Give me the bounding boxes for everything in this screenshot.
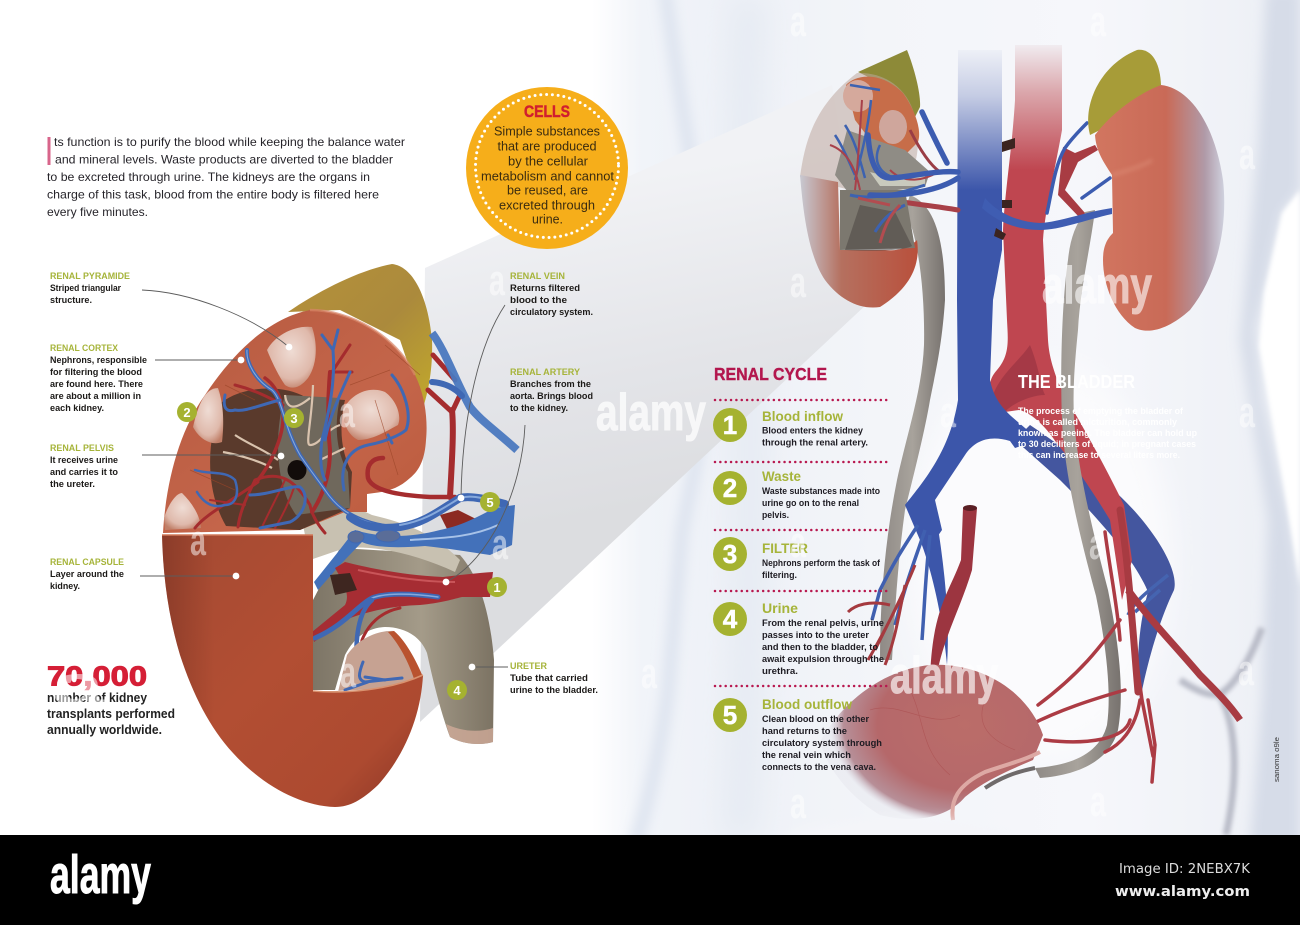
step 1: blood inflow xyxy=(713,408,868,448)
cells heading: CELLS xyxy=(524,102,570,121)
image id: Image ID: 2NEBX7K xyxy=(1119,862,1250,877)
kidney number badges: 1 xyxy=(493,580,501,595)
label: renal pyramide: RENAL PYRAMIDE xyxy=(50,271,130,281)
alamy watermarks: a xyxy=(1090,777,1106,826)
the bladder text block: The process of emptying the bladder of xyxy=(1018,406,1184,417)
step 5: blood outflow xyxy=(713,696,882,773)
label: renal cortex: are found here. There xyxy=(50,379,143,389)
left adrenal xyxy=(858,50,920,117)
callout: cells: be reused, are xyxy=(507,184,588,198)
lower cut cortex xyxy=(313,631,423,692)
upper renal vein branch xyxy=(432,333,517,450)
step 5: blood outflow: circulatory system through xyxy=(762,738,882,749)
left kidney xyxy=(800,73,940,308)
alamy watermarks: a xyxy=(940,388,956,437)
website: www.alamy.com xyxy=(1115,884,1250,900)
right ureter xyxy=(1035,210,1121,778)
vena cava xyxy=(905,50,1040,540)
left renal artery xyxy=(850,197,958,243)
label: renal cortex: for filtering the blood xyxy=(50,367,142,377)
lower blue branch xyxy=(315,594,438,638)
label: renal pyramide: Striped triangular xyxy=(50,283,121,293)
dark artery blob xyxy=(440,510,478,540)
step 5: blood outflow: 5 xyxy=(723,700,737,730)
leader lines xyxy=(140,290,525,667)
alamy watermarks: a xyxy=(641,649,657,698)
sinus veins xyxy=(247,350,385,526)
label: renal pelvis: RENAL PELVIS xyxy=(50,443,114,453)
callout: cells: urine. xyxy=(532,212,563,226)
step 3: filter: FILTER xyxy=(762,540,808,556)
main renal vein xyxy=(350,497,505,528)
step 5: blood outflow: hand returns to the xyxy=(762,726,847,737)
step 1: blood inflow: Blood inflow xyxy=(762,408,843,424)
statistic: 70,000 transplants: annually worldwide. xyxy=(47,723,162,737)
label: renal vein: Returns filtered xyxy=(510,283,580,293)
alamy watermarks: a xyxy=(790,518,806,567)
magnifier funnel shadow xyxy=(420,85,868,722)
step 2: waste: Waste substances made into xyxy=(762,486,880,497)
label: renal artery: to the kidney. xyxy=(510,403,568,413)
callout: cells: that are produced xyxy=(498,140,597,154)
right iliac vein xyxy=(1015,425,1175,700)
step 4: urine: and then to the bladder, to xyxy=(762,642,878,653)
intro text xyxy=(47,135,405,219)
label: renal artery xyxy=(510,367,593,413)
renal artery xyxy=(312,562,493,642)
alamy watermarks: a xyxy=(489,256,505,305)
label: renal capsule: kidney. xyxy=(50,581,80,591)
kidney number badges xyxy=(177,402,507,700)
step 2: waste: Waste xyxy=(762,468,801,484)
left iliac arteries xyxy=(930,508,977,680)
step 4: urine: await expulsion through the xyxy=(762,654,884,665)
sinus arteries xyxy=(312,372,330,512)
statistic: 70,000 transplants xyxy=(47,653,175,737)
label: ureter: URETER xyxy=(510,661,547,671)
statistic: 70,000 transplants: a xyxy=(52,653,105,716)
label: ureter: Tube that carried xyxy=(510,673,588,683)
torso background xyxy=(592,0,1300,845)
label: renal vein: circulatory system. xyxy=(510,307,593,317)
statistic: 70,000 transplants: transplants performed xyxy=(47,707,175,721)
alamy watermarks: a xyxy=(190,516,206,565)
label: ureter: urine to the bladder. xyxy=(510,685,598,695)
the bladder text block xyxy=(1018,372,1197,461)
aorta xyxy=(990,45,1132,600)
label: renal vein: blood to the xyxy=(510,295,567,305)
alamy watermarks: a xyxy=(1238,646,1254,695)
callout: cells: metabolism and cannot xyxy=(481,170,615,184)
alamy watermarks: a xyxy=(790,779,806,828)
step 1: blood inflow: 1 xyxy=(723,410,737,440)
label: renal artery: RENAL ARTERY xyxy=(510,367,580,377)
step 1: blood inflow: through the renal artery. xyxy=(762,438,868,448)
step 4: urine xyxy=(713,600,884,677)
step 2: waste: urine go on to the renal xyxy=(762,498,859,509)
statistic: 70,000 transplants: number of kidney xyxy=(47,691,147,705)
label: renal cortex: are about a million in xyxy=(50,391,141,401)
right renal vein and artery xyxy=(1058,145,1098,218)
alamy watermarks: a xyxy=(1239,130,1255,179)
callout: cells: excreted through xyxy=(499,198,595,212)
kidney cross-section illustration xyxy=(162,264,517,807)
step 4: urine: From the renal pelvis, urine xyxy=(762,618,884,629)
alamy watermarks: a xyxy=(339,388,355,437)
step 3: filter: filtering. xyxy=(762,570,797,581)
label: renal pelvis: It receives urine xyxy=(50,455,118,465)
calyx strips xyxy=(223,385,345,468)
label: renal cortex: Nephrons, responsible xyxy=(50,355,147,365)
step 2: waste xyxy=(713,468,880,521)
drop cap xyxy=(48,137,50,165)
step 4: urine: passes into to the ureter xyxy=(762,630,869,641)
right adrenal xyxy=(1088,50,1161,135)
callout: cells: Simple substances xyxy=(494,124,600,138)
vein loops xyxy=(348,531,364,543)
bladder xyxy=(820,665,1043,819)
capsule front block xyxy=(162,535,423,807)
label: renal vein xyxy=(510,271,593,317)
cortical fissures xyxy=(190,345,420,490)
intro text: and mineral levels. Waste products are diverted to the bladder xyxy=(55,152,393,166)
dark gap under artery xyxy=(330,573,357,595)
pelvis opening xyxy=(288,460,306,480)
alamy watermarks: alamy xyxy=(596,384,706,442)
left ureter xyxy=(880,195,945,660)
step 4: urine: 4 xyxy=(723,604,738,634)
alamy watermarks xyxy=(190,0,1255,828)
alamy watermarks: a xyxy=(492,520,508,569)
alamy watermarks: alamy xyxy=(1042,257,1152,315)
step 1: blood inflow: Blood enters the kidney xyxy=(762,426,864,436)
callout: cells: by the cellular xyxy=(508,154,588,168)
label: renal pyramide: structure. xyxy=(50,295,92,305)
the bladder text block: to 30 deciliters of liquid; in pregnant cases xyxy=(1018,439,1196,450)
urinary system illustration xyxy=(785,45,1240,860)
step 2: waste: pelvis. xyxy=(762,510,789,521)
dotted dividers xyxy=(715,400,890,686)
intro text: to be excreted through urine. The kidneys are the organs in xyxy=(47,170,370,184)
alamy watermarks: a xyxy=(1239,388,1255,437)
the bladder text block: this can increase to several liters more. xyxy=(1018,450,1180,461)
the bladder text block: urine is called micturition, commonly xyxy=(1018,417,1178,428)
kidney number badges: 5 xyxy=(486,495,494,510)
footer logo: alamy xyxy=(50,845,151,905)
step 3: filter: Nephrons perform the task of xyxy=(762,558,881,569)
step 5: blood outflow: the renal vein which xyxy=(762,750,851,761)
step 4: urine: Urine xyxy=(762,600,798,616)
left renal vein xyxy=(868,112,958,195)
callout: cells xyxy=(466,87,628,249)
label: renal capsule: RENAL CAPSULE xyxy=(50,557,124,567)
alamy watermarks: a xyxy=(790,258,806,307)
left iliac vein fork xyxy=(905,501,948,665)
marker dots xyxy=(233,344,475,670)
kidney number badges: 3 xyxy=(290,411,298,426)
urethra xyxy=(952,752,1040,820)
kidney number badges: 2 xyxy=(183,405,191,420)
step 5: blood outflow: connects to the vena cava. xyxy=(762,762,876,773)
heading: renal cycle: RENAL CYCLE xyxy=(714,364,827,384)
label: renal artery: aorta. Brings blood xyxy=(510,391,593,401)
intro text: every five minutes. xyxy=(47,205,148,219)
footer bar xyxy=(0,835,1300,925)
label: renal pelvis xyxy=(50,443,118,489)
label: renal cortex: each kidney. xyxy=(50,403,104,413)
intro text: charge of this task, blood from the entire body is filtered here xyxy=(47,188,379,202)
step 4: urine: urethra. xyxy=(762,666,798,677)
step 3: filter: 3 xyxy=(723,539,737,569)
step 3: filter xyxy=(713,537,881,581)
step 5: blood outflow: Blood outflow xyxy=(762,696,852,712)
label: renal artery: Branches from the xyxy=(510,379,591,389)
label: renal capsule: Layer around the xyxy=(50,569,124,579)
label: ureter xyxy=(510,661,598,695)
ureter and pelvis xyxy=(313,548,494,744)
pyramids xyxy=(267,327,316,388)
the bladder text block: known as peeing. The bladder can hold up xyxy=(1018,428,1197,439)
beige fat band xyxy=(300,500,460,572)
step 5: blood outflow: Clean blood on the other xyxy=(762,714,869,725)
label: renal cortex xyxy=(50,343,147,413)
label: renal cortex: RENAL CORTEX xyxy=(50,343,118,353)
label: renal pelvis: and carries it to xyxy=(50,467,118,477)
alamy watermarks: a xyxy=(1089,520,1105,569)
right kidney xyxy=(1095,85,1224,331)
alamy watermarks: alamy xyxy=(890,647,998,705)
alamy watermarks: a xyxy=(340,648,356,697)
red loop to cortex xyxy=(368,458,455,497)
upper cortex xyxy=(163,310,427,533)
renal sinus xyxy=(210,389,352,530)
the bladder text block: THE BLADDER xyxy=(1018,372,1135,392)
label: renal capsule xyxy=(50,557,124,591)
adrenal gland xyxy=(288,264,432,408)
statistic: 70,000 transplants: 70,000 xyxy=(47,660,147,692)
label: renal pyramide xyxy=(50,271,130,305)
intro text: ts function is to purify the blood while keeping the balance water xyxy=(54,135,405,149)
label: renal vein: RENAL VEIN xyxy=(510,271,565,281)
step 2: waste: 2 xyxy=(723,473,737,503)
kidney number badges: 4 xyxy=(453,683,461,698)
right artery branches xyxy=(1030,532,1155,782)
label: renal pelvis: the ureter. xyxy=(50,479,95,489)
vertical credit: sanoma o9le xyxy=(1274,737,1281,782)
